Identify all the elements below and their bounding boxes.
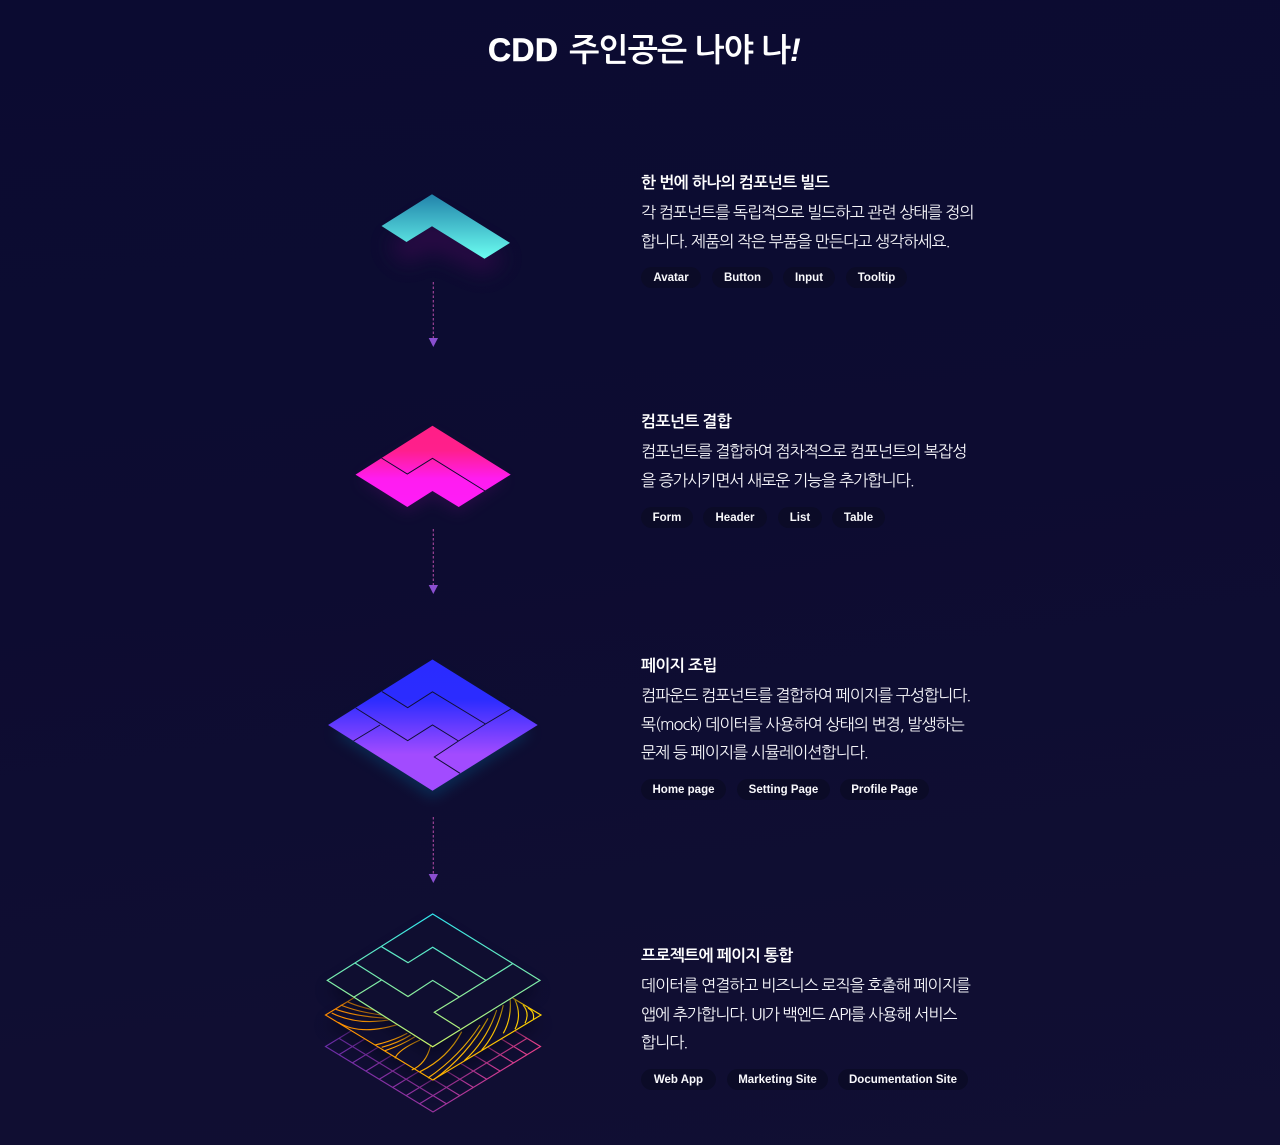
step 1 description: 각 컴포넌트를 독립적으로 빌드하고 관련 상태를 정의	[641, 205, 974, 221]
step 4 description: 앱에 추가합니다. UI가 백엔드 API를 사용해 서비스	[641, 1006, 957, 1022]
step 4 tags	[641, 1069, 968, 1090]
step 2 tags: List	[790, 512, 810, 524]
step 3 tags: Home page	[652, 784, 714, 796]
step 4 tags: Marketing Site	[738, 1074, 817, 1086]
step 1 tags: Input	[795, 272, 823, 284]
step 3 description	[641, 688, 970, 761]
step 3 description: 컴파운드 컴포넌트를 결합하여 페이지를 구성합니다.	[641, 688, 970, 704]
step 3 tags: Profile Page	[851, 784, 918, 796]
icon: combined components layer	[356, 426, 511, 513]
step 1 heading: 한 번에 하나의 컴포넌트 빌드	[641, 176, 829, 191]
icon: page assembly layer	[328, 660, 538, 798]
step 4 description: 합니다.	[641, 1035, 687, 1051]
step 2 description: 컴포넌트를 결합하여 점차적으로 컴포넌트의 복잡성	[641, 444, 966, 460]
arrow: step 1 to 2	[429, 282, 438, 347]
step 2 tags: Form	[653, 512, 681, 524]
step 4 heading: 프로젝트에 페이지 통합	[641, 949, 793, 964]
step 4 description	[641, 978, 970, 1051]
step 3 tags: Setting Page	[749, 784, 818, 796]
step 1 tags: Button	[724, 272, 761, 284]
arrow: step 2 to 3	[429, 529, 438, 594]
arrow: step 3 to 4	[429, 817, 438, 883]
step 2 tags: Header	[716, 512, 754, 524]
step 4 tags: Documentation Site	[849, 1074, 957, 1086]
step 1 description	[641, 204, 974, 250]
step 1 tags: Avatar	[653, 272, 689, 284]
step 2 description: 을 증가시키면서 새로운 기능을 추가합니다.	[641, 472, 914, 488]
step 2 tags	[641, 507, 885, 528]
step 4 tags: Web App	[654, 1074, 703, 1086]
title: CDD 주인공은 나야 나!	[488, 32, 800, 68]
step 2 heading: 컴포넌트 결합	[641, 415, 731, 430]
step 4 description: 데이터를 연결하고 비즈니스 로직을 호출해 페이지를	[641, 978, 970, 994]
step 1 tags: Tooltip	[858, 272, 895, 284]
step 2 description	[641, 444, 966, 488]
step 1 description: 합니다. 제품의 작은 부품을 만든다고 생각하세요.	[641, 234, 950, 250]
layer: orange contour map	[326, 950, 541, 1080]
step 3 description: 목(mock) 데이터를 사용하여 상태의 변경, 발생하는	[641, 716, 964, 732]
layer: outlined component map	[327, 914, 540, 1047]
step 3 description: 문제 등 페이지를 시뮬레이션합니다.	[641, 745, 868, 761]
step 1 tags	[641, 267, 907, 288]
icon: single component layer	[382, 194, 510, 274]
icon: project integration stacked layers	[326, 914, 541, 1112]
step 3 tags	[641, 779, 929, 800]
layer: purple pink grid	[326, 981, 540, 1112]
step 2 tags: Table	[844, 512, 873, 524]
step 3 heading: 페이지 조립	[641, 659, 717, 674]
